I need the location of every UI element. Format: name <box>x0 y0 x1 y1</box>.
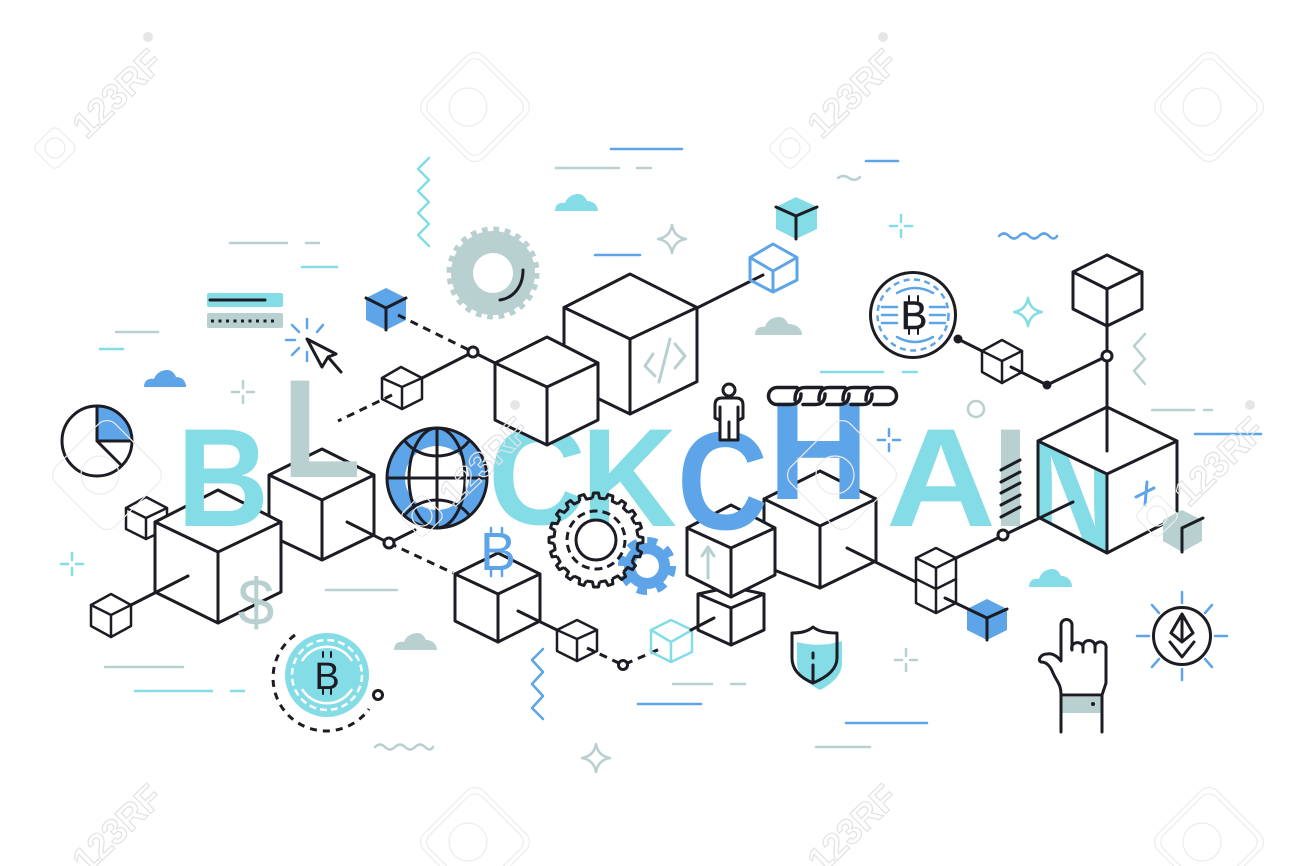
connector with nodes <box>1011 351 1112 390</box>
node circle <box>468 347 478 357</box>
lower center cube <box>455 553 540 642</box>
watermark text: 123RF <box>799 41 905 146</box>
pie chart <box>62 406 132 476</box>
center cube <box>495 337 598 445</box>
dollar sign: $ <box>238 565 274 639</box>
letter C blue: C <box>677 402 768 559</box>
cursor <box>286 319 341 372</box>
cube under letter H <box>764 471 876 588</box>
watermark text: 123RF <box>431 409 537 514</box>
dashed connector <box>398 315 473 352</box>
cube under letter L <box>269 449 374 560</box>
decorative dashes top <box>100 149 1261 747</box>
cyan filled cube <box>776 197 817 239</box>
globe <box>387 428 487 528</box>
small cube upper left <box>382 367 422 409</box>
letter A cyan: A <box>886 399 996 556</box>
large cube with code icon <box>564 274 697 414</box>
shield <box>792 627 842 690</box>
UI bars <box>207 293 283 328</box>
connector with node <box>347 522 453 573</box>
small cube bottom left <box>91 594 131 637</box>
letter I gray: I <box>992 399 1029 556</box>
letter H blue: H <box>768 372 869 529</box>
letter L: L <box>282 350 361 507</box>
dashed connector with node <box>587 648 662 670</box>
letter K cyan: K <box>581 399 677 556</box>
lower stacked cube <box>698 587 764 645</box>
small cube top left <box>126 497 167 539</box>
waves <box>375 176 1057 750</box>
blue outline cube <box>750 244 797 292</box>
bitcoin coin outline <box>870 272 956 358</box>
bitcoin coin cyan: B <box>314 656 340 698</box>
connector between coin and cube <box>954 334 982 351</box>
vertical connector to top right cube <box>1106 289 1108 451</box>
connector to bottom-left cube <box>131 576 188 605</box>
blue gear <box>623 542 671 590</box>
letter N inside cube, clipped to the cube face <box>1036 406 1179 554</box>
zigzag blue <box>532 649 543 719</box>
clouds <box>144 194 1072 650</box>
black outline gear <box>548 492 644 588</box>
watermark text: 123RF <box>1166 409 1272 514</box>
person <box>715 384 743 440</box>
watermark text: 123RF <box>64 41 170 146</box>
gray cube right <box>1163 510 1203 552</box>
bitcoin coin cyan <box>273 633 382 731</box>
connector <box>518 611 557 630</box>
connector to stacked cube <box>691 618 714 630</box>
letter N inside cube, clipped to the cube face: N <box>1027 385 1119 597</box>
zigzag cyan <box>418 158 429 246</box>
gray gear <box>449 229 537 317</box>
connector node <box>422 352 495 378</box>
bitcoin glyph blue: B <box>480 522 516 582</box>
connector to double cube <box>956 502 1073 558</box>
blue filled cube lower right <box>945 598 1007 640</box>
small cube top right <box>982 340 1022 383</box>
sparkles <box>61 215 1042 772</box>
connector: center cube to blue cube <box>697 275 763 308</box>
letter C cyan: C <box>488 397 586 554</box>
dashed connector <box>338 395 392 421</box>
upper stacked cube <box>687 505 775 597</box>
hand pointer <box>1039 620 1106 732</box>
small cube lower center <box>557 620 597 661</box>
zigzag gray <box>1134 334 1145 384</box>
hatch lines over I <box>1001 460 1020 517</box>
large cube under letter B <box>155 490 281 623</box>
ethereum icon <box>1137 592 1227 680</box>
double stacked cube <box>916 548 956 613</box>
letter B: B <box>177 399 269 556</box>
connector right of H cube <box>847 548 916 582</box>
bitcoin coin outline: B <box>901 294 927 338</box>
cyan outline cube <box>651 620 692 662</box>
chain <box>768 388 896 404</box>
blue filled cube <box>366 288 406 330</box>
top right cube <box>1073 255 1142 326</box>
